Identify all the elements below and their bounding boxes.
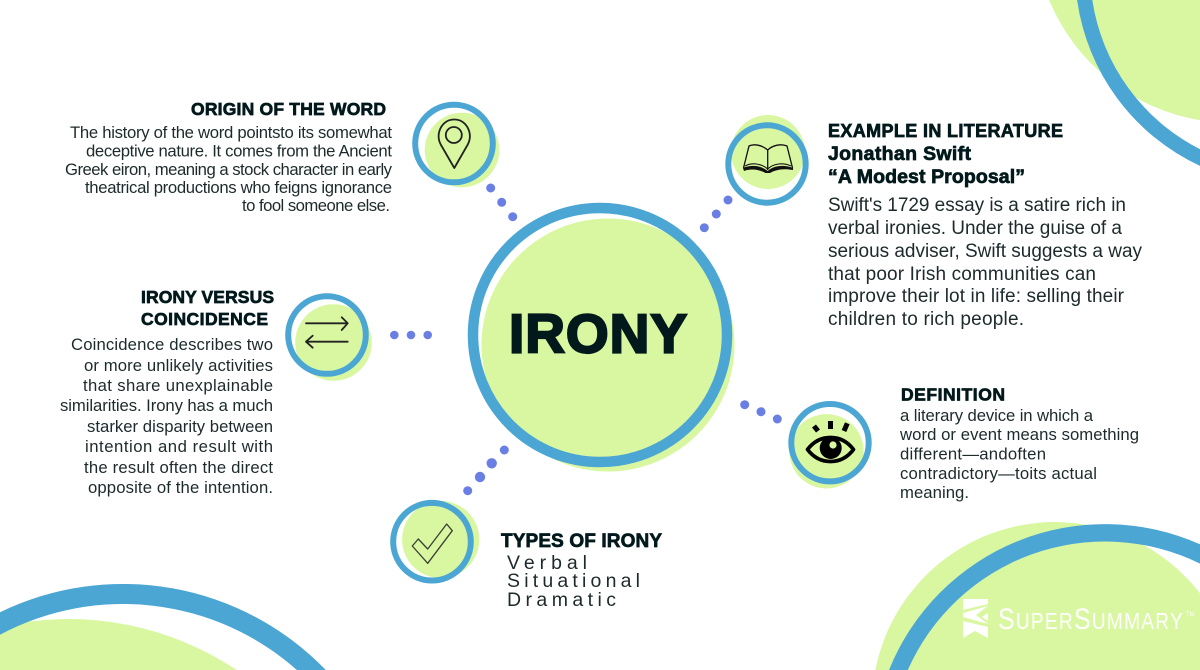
dotted connector: origin [486, 184, 517, 221]
body: definition: different—andoften [900, 444, 1046, 464]
body: literature: children to rich people. [828, 309, 1024, 330]
icon: location pin [415, 105, 499, 187]
text block: irony versus coincidence [60, 287, 274, 497]
decoration: bottom left circles [0, 584, 326, 670]
heading: irony versus coincidence: IRONY VERSUS [141, 287, 274, 307]
list: types: Dramatic [507, 589, 616, 611]
trademark: TM [1186, 612, 1195, 618]
heading: origin: ORIGIN OF THE WORD [191, 99, 386, 119]
icon: opposing arrows [288, 296, 372, 381]
icon: check mark [393, 501, 479, 580]
dotted connector: coincidence [390, 331, 432, 339]
wordmark: SUPERSUMMARY [998, 603, 1184, 636]
heading: irony versus coincidence: COINCIDENCE [141, 309, 268, 329]
body: coincidence: starker disparity between [87, 417, 273, 436]
body: origin: to fool someone else. [242, 196, 390, 215]
icon: logo flag [963, 599, 988, 638]
body: coincidence: intention and result with [85, 437, 273, 456]
body: definition: meaning. [900, 483, 969, 502]
central circle: irony [473, 208, 734, 472]
body: coincidence: that share unexplainable [83, 376, 273, 395]
text block: example in literature [828, 121, 1142, 330]
dotted connector: literature [700, 196, 732, 232]
body: coincidence: opposite of the intention. [88, 478, 273, 497]
body: definition [899, 406, 1139, 502]
list: types: Verbal [507, 552, 587, 574]
title: IRONY [509, 302, 687, 364]
text block: types of irony [501, 531, 662, 611]
list: types: Situational [507, 570, 640, 592]
text block: definition [899, 384, 1139, 502]
body: origin: deceptive nature. It comes from the Ancient [86, 142, 392, 160]
dotted connector: types [463, 446, 509, 495]
body: literature: serious adviser, Swift suggests a way [828, 241, 1142, 262]
body: origin: Greek eiron, meaning a stock character in early [65, 160, 393, 179]
body: literature: Swift's 1729 essay is a satire rich in [828, 195, 1126, 216]
body: coincidence: similarities. Irony has a much [60, 396, 273, 415]
heading: example in literature: “A Modest Proposal” [828, 166, 1025, 188]
body: literature: improve their lot in life: selling their [828, 286, 1125, 307]
body: literature: that poor Irish communities can [828, 264, 1096, 285]
body: origin: theatrical productions who feigns ignorance [85, 178, 392, 197]
body: definition: a literary device in which a [900, 406, 1094, 425]
list: types [507, 552, 640, 611]
decoration: bottom right circles [875, 522, 1200, 670]
body: coincidence: Coincidence describes two [71, 335, 273, 354]
heading: irony versus coincidence [141, 287, 274, 329]
heading: types of irony: TYPES OF IRONY [501, 531, 662, 552]
body: literature: verbal ironies. Under the guise of a [828, 218, 1122, 239]
icon: open book [728, 115, 806, 203]
dotted connector: definition [740, 400, 782, 424]
heading: example in literature: Jonathan Swift [828, 143, 972, 165]
body: origin: The history of the word pointsto its somewhat [70, 123, 392, 142]
body: definition: contradictory—toits actual [900, 464, 1097, 483]
body: coincidence: or more unlikely activities [84, 356, 273, 375]
body: origin [65, 123, 393, 215]
logo: SuperSummary [963, 599, 1195, 638]
decoration: top right circles [1049, 0, 1200, 166]
body: coincidence: the result often the direct [84, 458, 273, 477]
body: coincidence [60, 335, 273, 497]
text block: origin of the word [65, 99, 393, 215]
body: definition: word or event means something [899, 425, 1139, 444]
heading: example in literature: EXAMPLE IN LITERATURE [828, 121, 1063, 141]
heading: definition: DEFINITION [901, 384, 1005, 404]
body: literature [828, 195, 1142, 330]
icon: eye [789, 404, 869, 488]
heading: example in literature [828, 121, 1063, 188]
